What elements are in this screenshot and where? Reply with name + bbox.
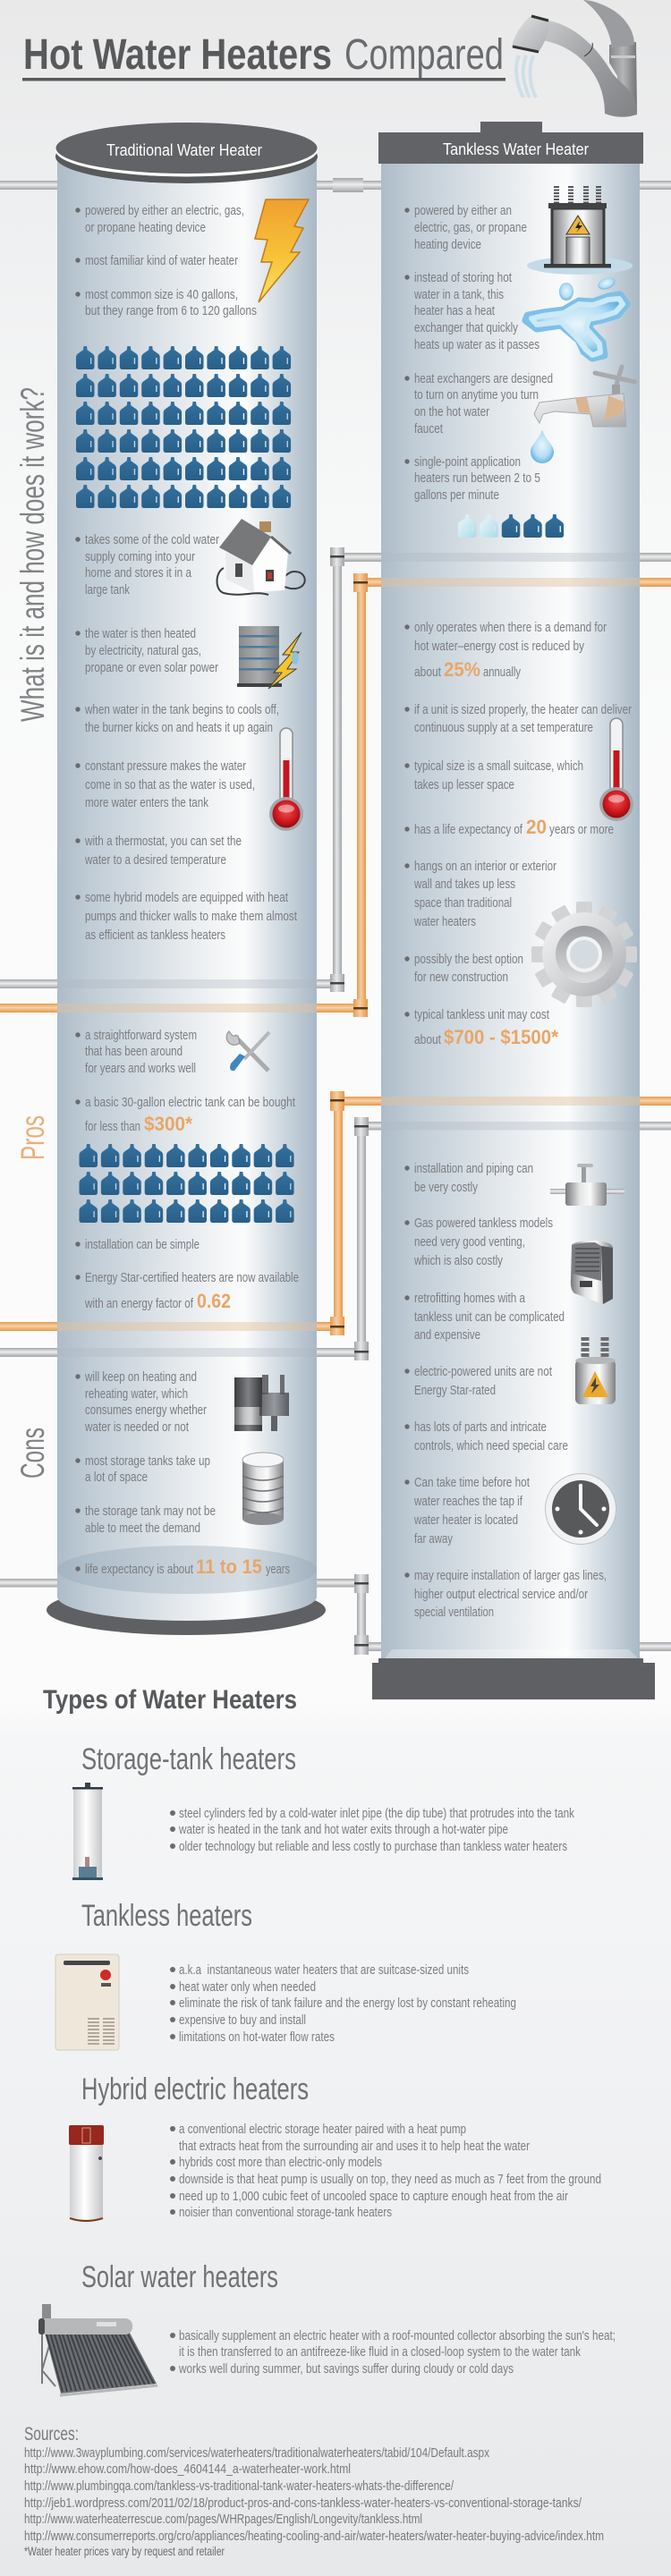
bullets: tankless operation: only operates when there is a demand for [414,620,607,635]
bullets: tankless faucet and point of use: gallons per minute [414,487,499,503]
icon: gear [531,902,637,1007]
side label: cons: Cons [14,1428,51,1479]
heading: tankless water heater: Tankless Water Heater [443,140,589,158]
chart: 30 gallon jugs [79,1144,294,1223]
bullets: tankless operation: hot water–energy cost is reduced by [414,639,584,654]
bullets: hybrid [170,2122,601,2220]
bullets: tankless: heat water only when needed [179,1979,316,1995]
icon: water drop [531,430,554,463]
bullets: tankless cons: Gas powered tankless models [414,1216,553,1231]
bullets: tankless power and heat exchanger: exchanger that quickly [414,320,518,335]
bullets: tankless cons: which is also costly [413,1253,503,1268]
sub-heading: solar: Solar water heaters [81,2260,278,2294]
bullets: tankless power and heat exchanger: water in a tank, this [413,287,504,302]
bullets: traditional how it works, power: but they range from 6 to 120 gallons [85,303,257,318]
bullets: hybrid: noisier than conventional storage-tank heaters [179,2205,392,2220]
bullets: traditional cons: able to meet the demand [85,1521,200,1536]
bullets: tankless cons: higher output electrical service and/or [414,1587,588,1602]
bullets: traditional thermostat and hybrid: with a thermostat, you can set the [84,834,242,849]
bullets: traditional burner [75,702,279,735]
bullets: traditional cons: a lot of space [85,1470,148,1485]
bullets: traditional cold water: supply coming into your [85,549,195,564]
pipes: grey mid loop [0,547,671,992]
bullets: tankless operation [404,620,632,838]
bullets: tankless space and cost: hangs on an interior or exterior [414,859,556,874]
bullets: tankless faucet and point of use: on the hot water [414,404,489,419]
sub-heading: hybrid: Hybrid electric heaters [81,2072,309,2106]
icon: water splash [526,275,626,358]
bullets: tankless cons: has lots of parts and intricate [414,1419,547,1435]
section: storage-tank heaters [72,1742,574,1880]
bullets: tankless cons: and expensive [414,1327,480,1343]
bullets: tankless [170,1962,516,2045]
bullets: storage-tank: steel cylinders fed by a cold-water inlet pipe (the dip tube) that protrudes into the tank [179,1806,574,1821]
bullets: tankless space and cost [404,859,558,1048]
bullets: tankless power and heat exchanger: heating device [414,237,481,252]
bullets: traditional heating: propane or even solar power [85,660,218,675]
bullets: traditional pros: that has been around [85,1044,183,1059]
bullets: traditional pros: a basic 30-gallon electric tank can be bought [85,1095,296,1110]
sources: http://www.ehow.com/how-does_4604144_a-waterheater-work.html [24,2462,351,2477]
icon: clock [546,1474,616,1544]
pipes: top coupling line [0,178,671,192]
bullets: hybrid: a conventional electric storage heater paired with a heat pump [179,2122,466,2137]
bullets: traditional cons: years [266,1562,290,1577]
bullets: traditional heating: by electricity, natural gas, [85,643,201,658]
bullets: tankless cons [404,1161,607,1620]
icon: wrench and screwdriver [226,1031,269,1071]
bullets: tankless operation: typical size is a small suitcase, which [414,758,583,774]
bullets: traditional cons [75,1369,290,1578]
image: storage tank [72,1783,103,1880]
bullets: traditional pros [75,1028,296,1135]
bullets: tankless faucet and point of use: to turn on anytime you turn [414,387,539,402]
bullets: tankless cons: water heater is located [413,1513,518,1528]
bullets: traditional cold water: large tank [85,582,130,597]
section: tankless heaters [55,1899,516,2050]
bullets: traditional pros continued: 0.62 [197,1290,231,1312]
bullets: tankless operation: about [414,665,442,680]
bullets: tankless cons: need very good venting, [414,1234,525,1250]
bullets: tankless power and heat exchanger: heats up water as it passes [414,337,539,352]
sources: http://www.plumbingqa.com/tankless-vs-traditional-tank-water-heaters-whats-the-difference/ [24,2479,454,2494]
bullets: tankless cons: retrofitting homes with a [414,1291,526,1306]
icon: house [217,519,305,595]
bullets: storage-tank: older technology but reliable and less costly to purchase than tankless water heaters [179,1839,567,1854]
chart: 60 gallon jugs [76,346,291,508]
icon: bandaged tap [534,367,635,427]
bullets: tankless operation: years or more [549,822,614,837]
bullets: traditional cons: consumes energy whether [85,1402,207,1418]
bullets: traditional cold water [75,532,219,597]
bullets: traditional how it works, power [75,203,257,318]
bullets: solar: works well during summer, but savings suffer during cloudy or cold days [178,2361,514,2377]
bullets: traditional burner: when water in the tank begins to cools off, [84,702,279,717]
bullets: tankless operation: annually [483,665,521,680]
pipes: orange mid loop [0,573,671,1017]
bullets: tankless operation: continuous supply at a set temperature [414,720,593,735]
icon: capacitor [575,1337,616,1404]
section: solar water heaters [38,2260,616,2395]
bullets: traditional cons: life expectancy is about [85,1562,194,1577]
bullets: tankless: expensive to buy and install [179,2012,306,2028]
bullets: traditional thermostat and hybrid [75,834,298,943]
bullets: storage-tank: water is heated in the tank and hot water exits through a hot-water pipe [178,1822,508,1837]
bullets: tankless faucet and point of use: heat exchangers are designed [414,371,553,386]
bullets: solar [170,2328,616,2377]
bullets: traditional cons: reheating water, which [85,1386,188,1402]
bullets: tankless space and cost: water heaters [413,914,476,929]
bullets: traditional pros continued: installation can be simple [85,1237,200,1252]
sources: Sources: [24,2424,79,2445]
bullets: tankless cons: tankless unit can be complicated [414,1309,565,1325]
bullets: traditional how it works, power: most familiar kind of water heater [85,253,238,268]
bullets: storage-tank [170,1806,574,1854]
bullets: tankless operation: 20 [526,816,547,838]
bullets: tankless space and cost: about [414,1032,442,1047]
bullets: traditional pressure [75,758,255,810]
bullets: tankless operation: takes up lesser space [414,777,514,792]
footnote: *Water heater prices vary by request and retailer [24,2545,225,2558]
heading: types of water heaters: Types of Water Heaters [43,1685,297,1715]
bullets: tankless cons: far away [414,1531,453,1546]
bullets: traditional cons: the storage tank may not be [85,1504,216,1519]
bullets: tankless power and heat exchanger: instead of storing hot [414,270,513,285]
bullets: tankless cons: be very costly [414,1180,478,1195]
icon: lightning bolt [255,199,309,302]
icon: stacked storage cylinder [242,1453,284,1525]
icon: electric heater [571,1241,613,1304]
bullets: traditional burner: the burner kicks on and heats it up again [85,720,273,735]
bullets: tankless power and heat exchanger [404,203,539,352]
bullets: traditional pros continued [75,1237,299,1312]
bullets: traditional how it works, power: or propane heating device [85,220,206,235]
bullets: tankless space and cost: wall and takes up less [413,877,515,892]
heading: traditional water heater: Traditional Water Heater [106,140,262,159]
bullets: traditional how it works, power: most common size is 40 gallons, [85,287,238,302]
image: tankless unit [55,1954,119,2050]
bullets: traditional cons: most storage tanks take up [85,1453,210,1469]
bullets: traditional pressure: constant pressure makes the water [85,758,246,774]
icon: transformer on puddle [527,186,633,275]
side label: what is it and how does it work: What is it and how does it work? [14,387,51,722]
bullets: tankless space and cost: $700 - $1500* [444,1026,558,1048]
panel: traditional water heater tank [47,123,326,1635]
bullets: traditional pressure: come in so that as the water is used, [85,777,255,792]
bullets: hybrid: that extracts heat from the surrounding air and uses it to help heat the water [179,2139,530,2154]
bullets: hybrid: need up to 1,000 cubic feet of uncooled space to capture enough heat from the air [179,2189,568,2204]
bullets: tankless faucet and point of use: heaters run between 2 to 5 [414,470,540,486]
sub-heading: storage-tank: Storage-tank heaters [81,1742,296,1776]
icon: thermometer left [269,728,303,831]
bullets: traditional cons: will keep on heating and [84,1369,197,1385]
bullets: tankless: a.k.a instantaneous water heaters that are suitcase-sized units [179,1962,469,1978]
bullets: traditional pros: $300* [144,1113,192,1135]
bullets: traditional thermostat and hybrid: pumps and thicker walls to make them almost [85,909,298,924]
bullets: traditional pros: for less than [85,1119,140,1134]
bullets: tankless cons: installation and piping can [414,1161,533,1176]
image: hybrid heater [69,2125,104,2221]
image: solar collector [38,2304,157,2395]
side label: pros: Pros [14,1115,51,1160]
bullets: tankless space and cost: space than traditional [414,895,512,911]
bullets: traditional pressure: more water enters the tank [85,795,208,810]
bullets: traditional cons: water is needed or not [84,1419,190,1435]
icon: server with lightning [237,626,302,689]
sources [24,2424,604,2558]
bullets: traditional thermostat and hybrid: water to a desired temperature [84,852,226,868]
bullets: traditional cons: 11 to 15 [196,1555,262,1578]
bullets: traditional thermostat and hybrid: some hybrid models are equipped with heat [85,890,289,905]
bullets: tankless space and cost: typical tankless unit may cost [414,1007,550,1022]
bullets: tankless power and heat exchanger: electric, gas, or propane [414,220,527,235]
bullets: tankless operation: 25% [444,658,480,681]
bullets: tankless cons: Can take time before hot [414,1475,531,1490]
bullets: tankless power and heat exchanger: powered by either an [414,203,512,218]
bullets: tankless: limitations on hot-water flow rates [179,2029,335,2045]
bullets: tankless cons: electric-powered units are not [414,1364,553,1379]
icon: thermometer right [599,718,633,821]
bullets: tankless power and heat exchanger: heater has a heat [414,303,496,318]
sources: http://www.3wayplumbing.com/services/waterheaters/traditionalwaterheaters/tabid/104/Default.aspx [24,2445,489,2461]
bullets: traditional thermostat and hybrid: as efficient as tankless heaters [85,928,225,943]
bullets: traditional pros: for years and works well [85,1061,196,1076]
bullets: tankless cons: may require installation of larger gas lines, [414,1568,607,1583]
bullets: tankless cons: controls, which need special care [414,1438,568,1453]
bullets: tankless: eliminate the risk of tank failure and the energy lost by constant reheating [179,1996,516,2011]
bullets: tankless faucet and point of use: faucet [414,421,444,436]
icon: kitchen faucet [512,0,637,117]
bullets: traditional heating [75,626,218,675]
chart: 5 gallon jugs, 3 filled [458,514,564,538]
bullets: traditional how it works, power: powered by either an electric, gas, [85,203,244,218]
pipes: bottom loop [0,1574,671,1655]
bullets: tankless space and cost: possibly the best option [414,952,523,967]
icon: motor [234,1375,289,1431]
section: hybrid electric heaters [69,2072,601,2221]
bullets: tankless cons: water reaches the tap if [413,1494,523,1509]
title: Compared [344,30,504,79]
bullets: tankless faucet and point of use [404,371,553,503]
bullets: tankless operation: has a life expectancy of [414,822,523,837]
sub-heading: tankless: Tankless heaters [81,1899,252,1933]
bullets: tankless cons: Energy Star-rated [414,1383,496,1398]
panel: tankless water heater tank [372,122,655,1699]
bullets: tankless cons: special ventilation [414,1605,494,1620]
bullets: traditional heating: the water is then heated [85,626,196,641]
bullets: traditional pros continued: with an energy factor of [84,1296,194,1311]
bullets: tankless faucet and point of use: single-point application [414,454,521,470]
bullets: tankless space and cost: for new construction [414,970,508,985]
icon: valve [550,1164,624,1206]
pipes: grey lower loop [0,1117,671,1360]
bullets: traditional cold water: takes some of the cold water [85,532,219,547]
title: Hot Water Heaters [23,30,332,79]
sources: http://www.waterheaterrescue.com/pages/WHRpages/English/Longevity/tankless.html [24,2512,422,2527]
bullets: traditional cold water: home and stores it in a [85,565,192,580]
bullets: hybrid: hybrids cost more than electric-only models [179,2155,382,2170]
bullets: traditional pros: a straightforward system [85,1028,197,1043]
bullets: traditional pros continued: Energy Star-certified heaters are now available [85,1270,299,1285]
pipes: orange lower loop [0,1091,671,1335]
